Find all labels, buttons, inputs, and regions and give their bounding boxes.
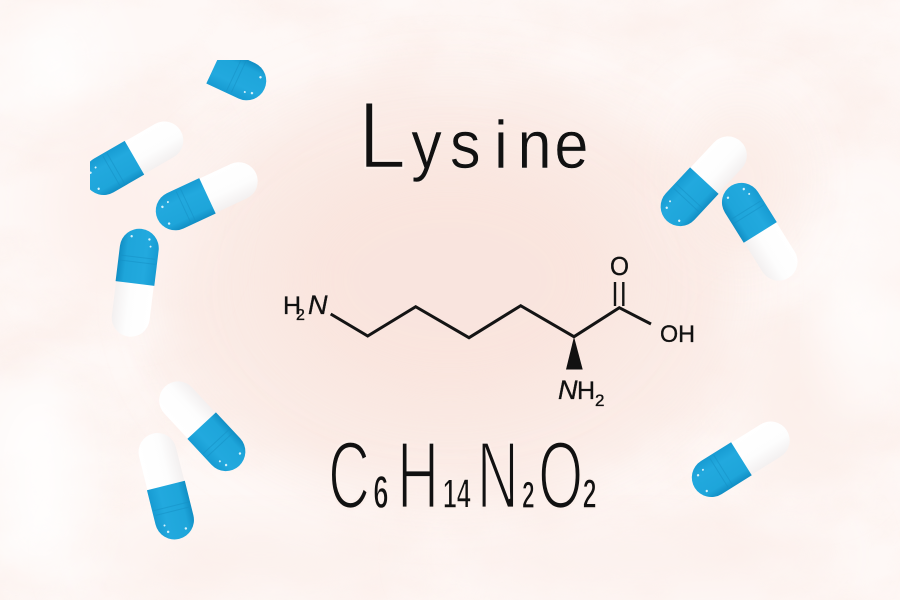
chemical formula: C6H14N2O2: O bbox=[538, 421, 583, 529]
label: NH2: H bbox=[577, 377, 595, 405]
infographic canvas bbox=[4, 35, 798, 549]
carbonyl double bond bbox=[615, 282, 623, 306]
stereo wedge bond bbox=[566, 337, 583, 370]
capsule: upper right, front bbox=[715, 175, 805, 288]
molecular structure of lysine bbox=[283, 251, 695, 410]
capsule: upper right, back bbox=[653, 128, 755, 234]
chemical formula: C6H14N2O2: C bbox=[328, 421, 370, 529]
label: H2N: 2 bbox=[296, 307, 305, 324]
label: H2N: H bbox=[283, 292, 301, 320]
chemical formula: C6H14N2O2: 14 bbox=[443, 472, 471, 518]
label: O: O bbox=[610, 251, 629, 281]
chemical formula: C6H14N2O2: H bbox=[397, 421, 439, 529]
capsule: left vertical bbox=[109, 227, 161, 339]
label: NH2: 2 bbox=[595, 391, 604, 410]
capsule: upper left middle bbox=[149, 156, 264, 237]
title: Lysine: ysine bbox=[411, 106, 588, 183]
capsule: upper left, cropped bbox=[90, 122, 183, 195]
label: H2N: N bbox=[308, 290, 328, 320]
label: OH: OH bbox=[660, 321, 695, 348]
chemical formula: C6H14N2O2: 6 bbox=[373, 468, 389, 519]
label: NH2: N bbox=[558, 375, 578, 405]
capsule: lower left vertical bbox=[134, 429, 198, 544]
chemical formula: C6H14N2O2: 2 bbox=[522, 474, 535, 516]
carbon chain bonds bbox=[331, 306, 651, 338]
chemical formula: C6H14N2O2: 2 bbox=[583, 472, 597, 518]
capsule: lower right bbox=[684, 414, 797, 504]
capsule: lower left diagonal bbox=[151, 373, 253, 479]
title: Lysine: L bbox=[358, 82, 406, 189]
capsule: top, cropped bbox=[206, 60, 266, 100]
chemical formula: C6H14N2O2: N bbox=[477, 421, 519, 529]
